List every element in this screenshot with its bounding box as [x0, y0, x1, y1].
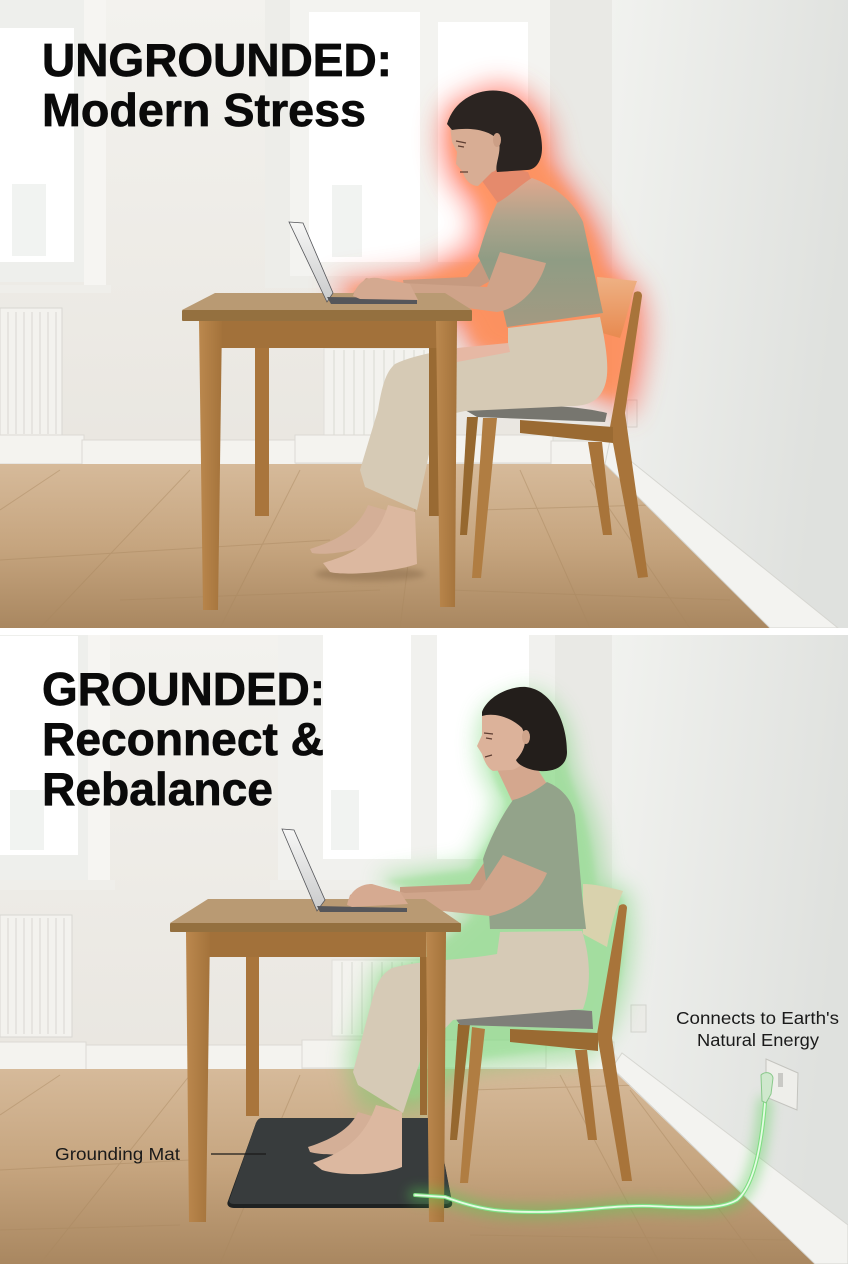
panel: grounded scene [0, 635, 848, 1264]
chair back splat [583, 884, 623, 947]
near foot [323, 505, 417, 574]
neck and face [450, 125, 502, 186]
far arm [400, 858, 497, 900]
chair [460, 277, 648, 578]
trousers [360, 317, 607, 510]
wooden floor [0, 1069, 815, 1264]
chair legs and frame [610, 291, 648, 578]
chair seat [465, 405, 607, 422]
near foot [313, 1105, 402, 1174]
neck [482, 170, 530, 202]
glowing grounding cable [415, 1103, 765, 1212]
hair [447, 90, 542, 172]
title: grounded [42, 663, 325, 815]
shirt [483, 782, 586, 929]
room: walls and windows [0, 635, 848, 1264]
label: earth connection: Natural Energy [697, 1030, 819, 1050]
wall outlet [627, 400, 637, 427]
radiators [0, 308, 432, 439]
label: earth connection [676, 1008, 839, 1050]
ear [493, 133, 501, 147]
eye and mouth [484, 733, 493, 757]
woman: upright posture [308, 687, 589, 1174]
apron [208, 932, 426, 957]
table top [182, 293, 472, 310]
radiators [0, 915, 422, 1037]
skirting boards [0, 1040, 614, 1069]
title: ungrounded: Modern Stress [42, 84, 366, 136]
near arm and hand [347, 855, 547, 916]
title: grounded: Reconnect & [42, 713, 324, 765]
far foot [308, 1112, 385, 1154]
near hand over laptop [347, 884, 408, 907]
skirting boards [0, 434, 609, 464]
room: walls and windows [0, 0, 848, 628]
front legs [186, 932, 210, 1222]
label: grounding mat: Grounding Mat [55, 1144, 180, 1164]
neck [495, 765, 547, 803]
desk [170, 899, 461, 1222]
wall outlet [631, 1005, 646, 1032]
back legs [246, 957, 259, 1116]
far arm [403, 260, 490, 287]
red stress glow [332, 84, 647, 420]
face [477, 713, 530, 771]
wooden floor [0, 464, 770, 628]
hair [482, 687, 567, 771]
chair [450, 884, 632, 1183]
title: ungrounded [44, 43, 388, 127]
front legs [199, 321, 222, 610]
trousers [353, 931, 589, 1113]
shirt [478, 178, 603, 327]
title: grounded: Rebalance [42, 763, 273, 815]
laptop [289, 222, 417, 304]
grounding mat [227, 1118, 452, 1208]
far foot [310, 505, 392, 554]
apron [220, 321, 438, 348]
chair legs and frame [597, 904, 632, 1181]
woman: stressed posture [310, 90, 607, 574]
desk [182, 293, 472, 610]
panel: ungrounded scene [0, 0, 848, 628]
green grounded glow [345, 690, 634, 1115]
title: ungrounded: UNGROUNDED: [42, 34, 392, 86]
chair seat [453, 1010, 593, 1029]
title: grounded: GROUNDED: [42, 663, 325, 715]
far thigh tint [457, 343, 510, 362]
eye and mouth [456, 141, 468, 172]
wall socket and plug [761, 1059, 798, 1110]
floor shadows [315, 567, 425, 581]
chair back splat [597, 277, 637, 338]
table top [170, 899, 460, 923]
near hand over laptop [353, 278, 418, 300]
near arm and hand [353, 252, 546, 312]
right wall skirting [605, 440, 838, 628]
laptop [282, 829, 407, 912]
ear [522, 730, 530, 744]
label: earth connection: Connects to Earth's [676, 1008, 839, 1028]
back legs [255, 348, 269, 516]
right wall skirting [612, 1053, 848, 1264]
